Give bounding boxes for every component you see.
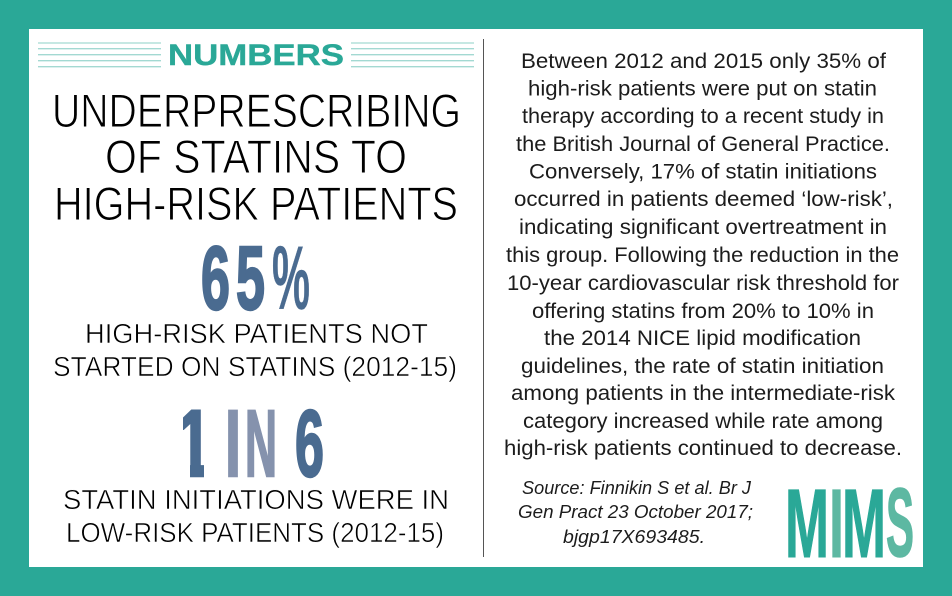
body text: 10-year cardiovascular risk threshold for [507, 272, 899, 295]
body text: therapy according to a recent study in [522, 105, 884, 128]
body text: this group. Following the reduction in the [506, 244, 899, 267]
title: HIGH-RISK PATIENTS [54, 177, 458, 230]
statistic: 65%: 5 [236, 229, 265, 329]
body text: among patients in the intermediate-risk [511, 382, 896, 405]
body text: offering statins from 20% to 10% in [532, 300, 874, 323]
body text: high-risk patients continued to decrease. [504, 437, 902, 460]
caption: 65% statistic: HIGH-RISK PATIENTS NOT [85, 318, 428, 349]
statistic: 1 in 6: 6 [295, 391, 324, 497]
statistic: 1 in 6: 1 [176, 391, 212, 497]
title [52, 84, 461, 230]
caption: 65% statistic [53, 318, 457, 382]
body text: category increased while rate among [523, 410, 883, 433]
source citation: Gen Pract 23 October 2017; [518, 502, 753, 522]
caption: 1 in 6 statistic: STATIN INITIATIONS WERE IN [63, 484, 449, 515]
body text: indicating significant overtreatment in [519, 216, 887, 239]
body text: guidelines, the rate of statin initiation [521, 355, 884, 378]
body text: occurred in patients deemed ‘low-risk’, [514, 188, 893, 211]
logo: MIMS: M [842, 469, 886, 578]
source citation: Source: Finnikin S et al. Br J [522, 478, 752, 498]
source citation [518, 478, 753, 547]
caption: 1 in 6 statistic: LOW-RISK PATIENTS (2012-15) [66, 517, 444, 548]
logo: MIMS: I [829, 469, 844, 578]
statistic: 1 in 6: N [245, 391, 277, 497]
statistic: 65%: 6 [201, 229, 230, 329]
title: UNDERPRESCRIBING [52, 84, 461, 137]
heading: numbers with ruled lines: NUMBERS [168, 39, 344, 72]
statistic: 1 in 6 [183, 408, 323, 478]
text: S [886, 468, 914, 577]
body text: high-risk patients were put on statin [528, 78, 877, 101]
body text: the 2014 NICE lipid modification [544, 327, 861, 350]
statistic: 65% [201, 229, 310, 329]
statistic: 1 in 6: I [225, 391, 241, 497]
caption: 65% statistic: STARTED ON STATINS (2012-15) [53, 351, 457, 382]
body text: the British Journal of General Practice. [516, 133, 890, 156]
column divider [483, 39, 484, 557]
logo: MIMS [785, 468, 914, 578]
body text: Between 2012 and 2015 only 35% of [521, 50, 886, 73]
logo: MIMS: M [785, 469, 829, 578]
title: OF STATINS TO [105, 130, 407, 183]
source citation: bjgp17X693485. [563, 527, 705, 547]
text: % [272, 229, 310, 329]
body text [504, 50, 902, 460]
caption: 1 in 6 statistic [63, 484, 449, 548]
body text: Conversely, 17% of statin initiations [529, 161, 877, 184]
